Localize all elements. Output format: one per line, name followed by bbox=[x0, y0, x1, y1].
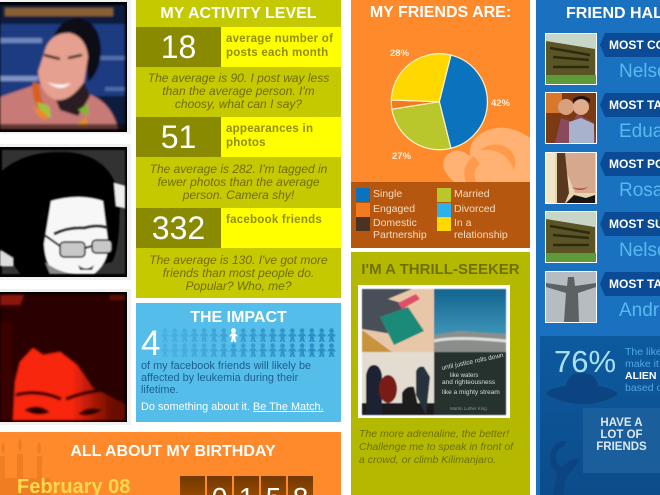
icon: hand bbox=[550, 440, 581, 495]
heading: my friends are: MY FRIENDS ARE: bbox=[370, 4, 511, 21]
legend label: domestic partnership: Partnership bbox=[373, 228, 427, 240]
callout: have a lot of friends: LOT OF bbox=[600, 429, 643, 441]
stat: 76 percent: 76% bbox=[554, 344, 616, 379]
heading: i'm a thrill-seeker: I'M A THRILL-SEEKER bbox=[361, 261, 520, 278]
legend bbox=[351, 182, 530, 248]
heading: the impact: THE IMPACT bbox=[190, 309, 287, 326]
panel: photo strip bbox=[0, 0, 132, 428]
photo: red portrait bbox=[0, 289, 131, 425]
stat: friends label: facebook friends bbox=[226, 214, 322, 226]
text: posts comparison: The average is 90. I post way less bbox=[148, 71, 329, 85]
photo collage bbox=[358, 285, 510, 418]
legend label: domestic partnership: Domestic bbox=[373, 217, 417, 229]
text: leukemia statement: affected by leukemia during their bbox=[141, 372, 298, 384]
panel: all about my birthday bbox=[0, 432, 341, 495]
legend label: in a relationship: In a bbox=[454, 217, 472, 229]
tile: digit 1 bbox=[234, 476, 259, 495]
text: posts comparison: than the average person. I'm bbox=[162, 84, 315, 98]
legend label: in a relationship bbox=[454, 217, 508, 240]
tag: most tagged with bbox=[600, 272, 660, 296]
tile: blank bbox=[180, 476, 205, 495]
tag: most tagged bbox=[600, 93, 660, 117]
pie chart: 28% bbox=[390, 48, 410, 59]
legend swatch: engaged bbox=[356, 203, 370, 217]
photo text: chalkboard quote: and righteousness bbox=[442, 379, 496, 386]
text: photos comparison: The average is 282. I'm tagged in bbox=[150, 162, 327, 176]
text: thrill-seeker description: Challenge me to speak in front of bbox=[359, 441, 513, 453]
text: photos comparison: person. Camera shy! bbox=[183, 188, 294, 202]
thumbnail: restaurant sign bbox=[545, 211, 597, 263]
text: leukemia statement: of my facebook friends will likely be bbox=[141, 360, 311, 372]
stat: number 4: 4 bbox=[141, 324, 160, 363]
text: leukemia statement: lifetime. bbox=[141, 384, 179, 396]
text: thrill-seeker description: The more adrenaline, the better! bbox=[359, 428, 509, 440]
text: photos comparison bbox=[150, 162, 327, 202]
thumbnail: couple bbox=[545, 92, 597, 144]
text: friends comparison: Popular? Who, me? bbox=[185, 279, 292, 293]
legend label: domestic partnership bbox=[373, 217, 427, 240]
photo text: chalkboard quote bbox=[441, 352, 505, 411]
tag: most posts bbox=[600, 152, 660, 176]
panel: friend hall of fame bbox=[536, 0, 660, 495]
tile: digit 5 bbox=[261, 476, 286, 495]
legend label: divorced: Divorced bbox=[454, 203, 495, 215]
text: call to action: Do something about it. Be The Match. bbox=[141, 401, 324, 413]
tag: most supportive bbox=[600, 212, 660, 236]
heading: my activity level: MY ACTIVITY LEVEL bbox=[160, 5, 317, 22]
icon: hearts bbox=[443, 128, 530, 182]
pie chart: 27% bbox=[392, 151, 412, 162]
countdown tiles bbox=[180, 476, 313, 495]
stat: photos label bbox=[221, 117, 341, 157]
text: photos comparison: fewer photos than the average bbox=[157, 175, 320, 189]
callout: have a lot of friends: HAVE A bbox=[600, 417, 643, 429]
photo text: chalkboard quote: until justice rolls down bbox=[441, 352, 505, 372]
panel: my activity level bbox=[136, 0, 341, 298]
legend swatch: in a relationship bbox=[437, 217, 451, 231]
tag: most comments bbox=[600, 33, 660, 57]
thumbnail: woman bbox=[545, 152, 597, 204]
text: alien likelihood bbox=[625, 346, 660, 394]
panel: my friends are bbox=[351, 0, 530, 248]
text: friends comparison: The average is 130. I've got more bbox=[149, 253, 328, 267]
stat: photos number bbox=[136, 117, 221, 157]
panel: the impact bbox=[136, 303, 341, 422]
heading: all about my birthday: ALL ABOUT MY BIRTHDAY bbox=[70, 443, 276, 460]
legend swatch: divorced bbox=[437, 203, 451, 217]
text: friends comparison bbox=[149, 253, 328, 293]
legend swatch: married bbox=[437, 188, 451, 202]
text: leukemia statement bbox=[141, 360, 311, 396]
pie chart: 42% bbox=[491, 98, 511, 109]
icon array: people bbox=[161, 328, 336, 357]
stat: photos number: 51 bbox=[161, 119, 196, 155]
stat: friends label bbox=[221, 208, 341, 248]
callout: have a lot of friends bbox=[583, 408, 660, 473]
text: friends comparison: friends than most people do. bbox=[163, 266, 314, 280]
stat: posts label: average number of bbox=[226, 33, 333, 45]
panel: alien abduction bbox=[540, 336, 660, 495]
stat: friends number: 332 bbox=[152, 210, 205, 246]
legend swatch: domestic partnership bbox=[356, 217, 370, 231]
photo text: chalkboard quote: like a mighty stream bbox=[442, 389, 500, 396]
icon: ufo bbox=[546, 373, 618, 404]
text: posts comparison bbox=[148, 71, 329, 111]
stat: photos label: appearances in bbox=[226, 123, 313, 135]
photo text: chalkboard quote: like waters bbox=[450, 373, 478, 379]
thumbnail: restaurant sign bbox=[545, 33, 597, 85]
panel: thrill-seeker bbox=[351, 252, 530, 495]
photo text: chalkboard quote: Martin Luther King bbox=[450, 406, 487, 411]
tile: digit 0 bbox=[207, 476, 232, 495]
legend label: single: Single bbox=[373, 188, 402, 200]
text: thrill-seeker description bbox=[359, 428, 514, 466]
icon: cake candles bbox=[0, 438, 50, 495]
legend label: in a relationship: relationship bbox=[454, 228, 508, 240]
text: posts comparison: choosy, what can I say? bbox=[175, 97, 302, 111]
legend label: married: Married bbox=[454, 188, 490, 200]
text: thrill-seeker description: a crowd, or climb Kilimanjaro. bbox=[359, 454, 496, 466]
callout: have a lot of friends: FRIENDS bbox=[596, 441, 647, 453]
stat: friends number bbox=[136, 208, 221, 248]
photo: curly hair portrait bbox=[0, 144, 131, 280]
legend swatch: single bbox=[356, 188, 370, 202]
thumbnail: christ the redeemer bbox=[545, 271, 597, 323]
tile: digit 8 bbox=[288, 476, 313, 495]
photo: swimming pool portrait bbox=[0, 0, 131, 134]
stat: posts label bbox=[221, 27, 341, 67]
stat: posts number bbox=[136, 27, 221, 67]
stat: posts label: posts each month bbox=[226, 46, 328, 58]
legend label: engaged: Engaged bbox=[373, 203, 415, 215]
stat: photos label: photos bbox=[226, 136, 266, 148]
stat: posts number: 18 bbox=[161, 29, 196, 65]
pie chart bbox=[390, 48, 511, 162]
